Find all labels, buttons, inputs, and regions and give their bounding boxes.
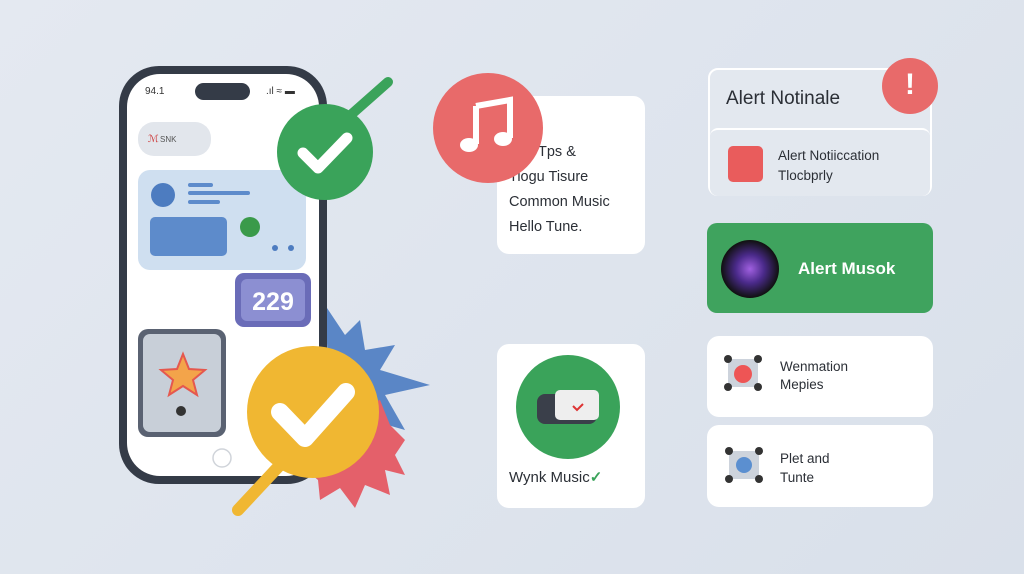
text: tips bbox=[509, 144, 610, 235]
icon: device on green circle bbox=[516, 355, 620, 459]
text: alert body: Tlocbprly bbox=[778, 168, 833, 183]
text bbox=[780, 451, 830, 485]
text: tips: Tps & bbox=[538, 144, 576, 160]
starburst red bbox=[300, 400, 405, 508]
icon: exclamation bbox=[882, 58, 938, 114]
card: tips bbox=[497, 96, 645, 254]
text bbox=[780, 359, 848, 392]
text: Alert Musok bbox=[798, 259, 895, 278]
phone: .ıl ≈ ▬ bbox=[266, 86, 295, 97]
starburst blue bbox=[325, 305, 430, 430]
phone: 94.1 bbox=[145, 86, 165, 97]
panel: alert notification bbox=[708, 68, 932, 196]
phone: SNK bbox=[160, 135, 177, 144]
icon: galaxy bbox=[721, 240, 779, 298]
sub card bbox=[710, 128, 930, 196]
text: Mepies bbox=[780, 377, 824, 392]
text: tips: Hello Tune. bbox=[509, 219, 582, 235]
icon: yellow check magnifier bbox=[238, 346, 379, 510]
phone bbox=[119, 66, 327, 484]
card: plet and tune bbox=[707, 425, 933, 507]
text: tips: Common Music bbox=[509, 194, 610, 210]
text: Tunte bbox=[780, 470, 814, 485]
icon: blue node bbox=[725, 447, 763, 483]
card: wenmation bbox=[707, 336, 933, 417]
icon: exclamation: ! bbox=[905, 68, 915, 101]
text: alert heading: Alert Notinale bbox=[726, 88, 840, 109]
text: alert body bbox=[778, 148, 879, 183]
phone: 229 bbox=[252, 288, 294, 316]
illustration: phone with badges bbox=[119, 66, 430, 516]
text: tips: Tiogu Tisure bbox=[509, 169, 588, 185]
card: wynk music bbox=[497, 344, 645, 508]
icon: green check bbox=[277, 82, 388, 200]
phone: ℳ bbox=[148, 134, 159, 145]
card: alert music bbox=[707, 223, 933, 313]
icon: red doc bbox=[728, 146, 763, 182]
icon: music note bbox=[433, 73, 543, 183]
icon: red node bbox=[724, 355, 762, 391]
text: wynk music: Wynk Music✓ bbox=[509, 469, 602, 486]
text: Wenmation bbox=[780, 359, 848, 374]
text: Plet and bbox=[780, 451, 830, 466]
text: alert body: Alert Notiiccation bbox=[778, 148, 879, 163]
